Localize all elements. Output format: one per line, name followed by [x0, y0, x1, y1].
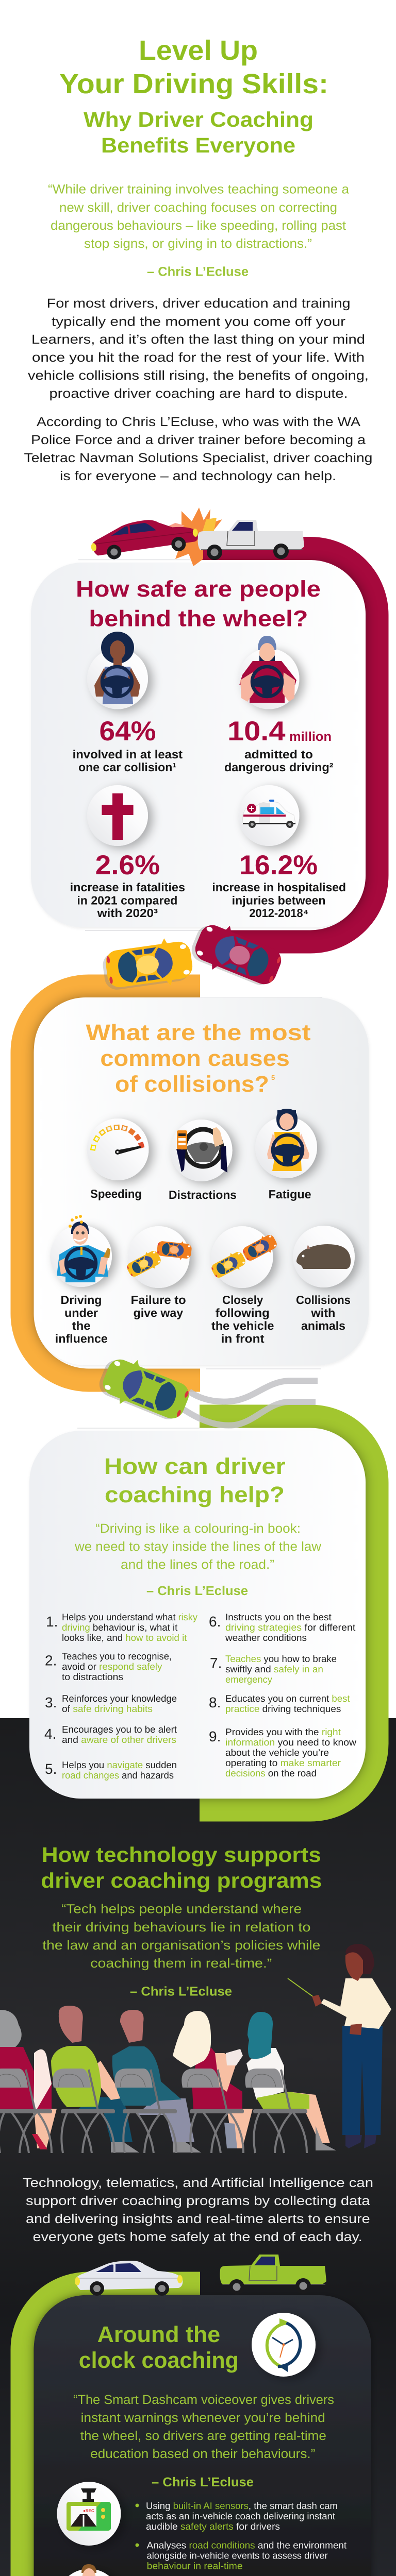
heading: how technology supports: driver coaching programs — [41, 1869, 322, 1892]
stat: 10.4 million: dangerous driving² — [224, 760, 334, 774]
title: Level Up — [139, 35, 258, 66]
quote: the wheel, so drivers are getting real-time — [80, 2429, 326, 2443]
quote — [73, 2393, 334, 2489]
quote: education based on their behaviours.” — [90, 2447, 315, 2461]
list: right column: 8. — [209, 1694, 221, 1710]
intro paragraphs: Police Force and a driver trainer before becoming a — [31, 433, 366, 447]
title: Why Driver Coaching — [84, 108, 314, 131]
cause: fatigue — [255, 1109, 317, 1178]
stat: 16.2%: injuries between — [232, 893, 326, 907]
heading: how technology supports — [41, 1843, 322, 1892]
list: left column: and aware of other drivers — [62, 1734, 176, 1745]
label: the vehicle — [211, 1319, 274, 1332]
list: right column: emergency — [225, 1674, 273, 1685]
list: left column: 1. — [46, 1614, 58, 1630]
label: in front — [221, 1332, 265, 1345]
quote: “The Smart Dashcam voiceover gives drivers — [73, 2393, 334, 2407]
illustration: white pickup — [198, 520, 304, 560]
stat: 10.4 million: admitted to — [244, 748, 313, 761]
panel: how can driver coaching help — [29, 1431, 366, 1799]
list: left column: to distractions — [62, 1671, 123, 1682]
panel: common causes of collisions — [34, 997, 369, 1365]
list: left column: road changes and hazards — [62, 1770, 174, 1781]
intro quote: new skill, driver coaching focuses on correcting — [59, 200, 337, 215]
quote: and the lines of the road.” — [121, 1557, 274, 1572]
label: Collisions — [296, 1293, 351, 1307]
illustration: explosion — [164, 507, 223, 566]
list: right column: Provides you with the right — [225, 1726, 341, 1737]
stat: 2.6%: in 2021 compared — [77, 893, 177, 907]
label: with — [310, 1306, 335, 1319]
cause: driving under the influence — [50, 1215, 112, 1287]
heading — [86, 1020, 311, 1097]
quote: tech: “Tech helps people understand where — [61, 1902, 302, 1917]
cause: closely following — [209, 1226, 279, 1288]
icon: ambulance — [238, 785, 299, 846]
intro paragraphs: proactive driver coaching are hard to dispute. — [50, 386, 348, 401]
intro quote: – Chris L’Ecluse — [147, 265, 249, 279]
list: left column: avoid or respond safely — [62, 1661, 162, 1672]
stat: 64%: 64% — [99, 716, 156, 747]
label: Distractions — [169, 1188, 237, 1201]
icon: dashcam — [57, 2482, 121, 2546]
list: left column: Reinforces your knowledge — [62, 1693, 177, 1704]
heading: Around the — [97, 2322, 220, 2347]
list: right column: about the vehicle you’re — [225, 1747, 329, 1758]
quote: “Driving is like a colouring-in book: — [95, 1521, 301, 1536]
quote — [74, 1521, 322, 1598]
list: right column: 6. — [209, 1614, 221, 1630]
intro paragraphs: once you hit the road for the rest of your life. With — [32, 350, 365, 365]
audience person 3 — [112, 2010, 201, 2153]
list: left column: of safe driving habits — [62, 1703, 153, 1714]
list: left column: looks like, and how to avoid it — [62, 1632, 187, 1643]
panel: how safe are people — [31, 563, 366, 927]
intro quote: “While driver training involves teaching someone a — [48, 182, 349, 197]
heading: clock coaching — [79, 2348, 239, 2373]
heading: How can driver — [104, 1454, 286, 1479]
car: yellow top view — [100, 935, 195, 994]
stat: 10.4 million — [224, 716, 334, 774]
list: right column: driving strategies for different — [225, 1622, 355, 1633]
car: red top view — [187, 916, 287, 993]
paragraph: technology: support driver coaching programs by collecting data — [26, 2194, 370, 2208]
title: Benefits Everyone — [101, 133, 295, 157]
title: Your Driving Skills: — [59, 69, 328, 99]
list: left column: Encourages you to be alert — [62, 1724, 177, 1735]
intro quote: stop signs, or giving in to distractions.” — [84, 236, 312, 251]
cause: distractions — [171, 1120, 233, 1181]
heading: coaching help? — [105, 1482, 285, 1507]
label — [131, 1293, 186, 1319]
stat: 2.6%: with 2020³ — [97, 906, 158, 920]
bullets: behaviour in real-time — [147, 2561, 243, 2571]
road: orange — [10, 975, 200, 1392]
quote: instant warnings whenever you’re behind — [81, 2411, 325, 2425]
intro paragraphs: For most drivers, driver education and training — [47, 296, 351, 311]
illustration: classroom — [0, 1944, 391, 2153]
label — [211, 1293, 274, 1345]
audience person 5 — [245, 2012, 336, 2153]
list: right column: practice driving techniques — [225, 1703, 341, 1714]
heading — [76, 577, 321, 632]
list: left column: 5. — [45, 1761, 57, 1777]
car: green top view — [94, 1350, 194, 1427]
list: left column: Teaches you to recognise, — [62, 1651, 172, 1662]
illustration: red car crash — [89, 514, 200, 562]
stat: 64% — [73, 716, 183, 774]
bullets: alongside in-vehicle events to assess driver — [147, 2550, 328, 2561]
stat: 16.2%: 16.2% — [239, 850, 318, 880]
intro paragraphs: vehicle collisions still rising, the benefits of ongoing, — [28, 368, 369, 383]
list: right column: Instructs you on the best — [225, 1612, 332, 1622]
list: left column: driving behaviour is, what it — [62, 1622, 177, 1633]
label: Driving — [61, 1293, 102, 1307]
label — [55, 1293, 108, 1345]
list: left column: Helps you understand what risky — [62, 1612, 198, 1622]
stat: 16.2%: increase in hospitalised — [212, 880, 346, 894]
bullets: Analyses road conditions and the environment — [147, 2540, 346, 2550]
label: Closely — [222, 1293, 263, 1307]
quote: we need to stay inside the lines of the law — [74, 1539, 322, 1554]
quote: tech: the law and an organisation’s policies while — [42, 1938, 320, 1953]
list: right column — [209, 1612, 357, 1778]
label — [296, 1293, 351, 1332]
label: influence — [55, 1332, 108, 1345]
quote: tech — [42, 1902, 320, 1999]
icon: woman driver — [87, 632, 148, 709]
teacher — [288, 1944, 391, 2148]
dark technology section background — [0, 1718, 396, 2576]
stat: 64%: one car collision¹ — [78, 760, 176, 774]
intro paragraphs: is for everyone – and technology can help. — [60, 469, 336, 483]
list: right column: swiftly and safely in an — [225, 1664, 323, 1674]
car: green pickup — [220, 2255, 326, 2295]
icon: dashcam: ●REC — [83, 2509, 94, 2513]
bullets — [135, 2500, 350, 2576]
list: right column: information you need to know — [225, 1737, 357, 1748]
paragraph: technology: everyone gets home safely at the end of each day. — [33, 2230, 362, 2244]
icon: green driver — [57, 2564, 121, 2576]
intro quote — [48, 182, 349, 279]
stat: 2.6%: 2.6% — [95, 850, 160, 880]
heading — [79, 2322, 239, 2373]
bullets: audible safety alerts for drivers — [146, 2521, 280, 2532]
cause: speeding — [87, 1118, 148, 1180]
audience person 1 — [0, 2010, 57, 2153]
intro paragraphs: Learners, and it’s often the last thing on your mind — [31, 332, 365, 347]
heading: What are the most — [86, 1020, 311, 1045]
list: left column: 4. — [44, 1726, 56, 1742]
label: following — [216, 1306, 270, 1319]
label: Speeding — [90, 1187, 142, 1200]
label: Failure to — [131, 1293, 186, 1307]
list: left column: 2. — [45, 1653, 57, 1669]
panel: around the clock coaching — [34, 2295, 371, 2576]
list: right column: weather conditions — [225, 1632, 307, 1643]
label: the — [72, 1319, 91, 1332]
quote: tech: their driving behaviours lie in relation to — [52, 1920, 310, 1935]
intro paragraphs: Teletrac Navman Solutions Specialist, driver coaching — [24, 451, 372, 465]
heading: 5 — [271, 1074, 275, 1081]
icon: male driver — [238, 636, 299, 709]
quote: – Chris L’Ecluse — [146, 1584, 248, 1598]
list: right column: Teaches you how to brake — [225, 1653, 337, 1664]
label: animals — [301, 1319, 345, 1332]
title — [59, 35, 328, 157]
bullets: acts as an in-vehicle coach delivering instant — [146, 2511, 335, 2521]
stat: 10.4 million: million — [289, 730, 332, 744]
list: right column: 7. — [210, 1655, 222, 1671]
list: left column: 3. — [45, 1694, 57, 1710]
label: give way — [134, 1306, 183, 1319]
list: left column — [44, 1612, 198, 1781]
icon: cross — [87, 785, 148, 846]
intro paragraphs: typically end the moment you come off your — [52, 315, 345, 329]
stat: 64%: involved in at least — [73, 748, 183, 761]
heading — [104, 1454, 286, 1507]
paragraph: technology: Technology, telematics, and Artificial Intelligence can — [23, 2176, 373, 2190]
car: white sedan — [75, 2261, 183, 2296]
skid marks — [183, 1381, 318, 1426]
heading: of collisions? — [115, 1072, 269, 1097]
audience person 2 — [51, 2006, 139, 2153]
stat: 2.6% — [70, 850, 185, 920]
list: left column: Helps you navigate sudden — [62, 1759, 177, 1770]
intro quote: dangerous behaviours – like speeding, rolling past — [51, 218, 346, 233]
intro paragraphs: According to Chris L’Ecluse, who was with the WA — [37, 415, 360, 429]
heading: common causes — [100, 1046, 290, 1071]
cause: collisions with animals — [293, 1226, 355, 1287]
list: right column: 9. — [209, 1728, 221, 1744]
road: crimson — [202, 537, 389, 953]
cause: failure to give way — [124, 1226, 192, 1288]
heading: how technology supports: How technology supports — [42, 1843, 321, 1867]
stat: 16.2% — [212, 850, 346, 920]
stat: 10.4 million: 10.4 — [227, 716, 286, 747]
icon: clock — [252, 2313, 316, 2377]
label: under — [64, 1306, 98, 1319]
intro paragraphs — [24, 296, 372, 483]
list: right column: Educates you on current best — [225, 1693, 350, 1704]
quote: – Chris L’Ecluse — [152, 2475, 254, 2489]
stat: 2.6%: increase in fatalities — [70, 880, 185, 894]
heading: How safe are people — [76, 577, 321, 602]
bullets: Using built-in AI sensors, the smart dash cam — [146, 2500, 338, 2511]
road: green dark section — [10, 2272, 200, 2576]
paragraph: technology — [23, 2176, 373, 2244]
label: Fatigue — [269, 1188, 311, 1201]
quote: tech: coaching them in real-time.” — [90, 1956, 272, 1971]
paragraph: technology: and delivering insights and real-time alerts to ensure — [26, 2212, 370, 2226]
quote: tech: – Chris L’Ecluse — [130, 1985, 232, 1999]
stat: 16.2%: 2012-2018⁴ — [249, 906, 308, 920]
heading: behind the wheel? — [89, 606, 308, 632]
audience person 4 — [173, 2011, 253, 2153]
road: green — [200, 1404, 389, 1822]
list: right column: decisions on the road — [225, 1768, 317, 1778]
list: right column: operating to make smarter — [225, 1757, 341, 1768]
